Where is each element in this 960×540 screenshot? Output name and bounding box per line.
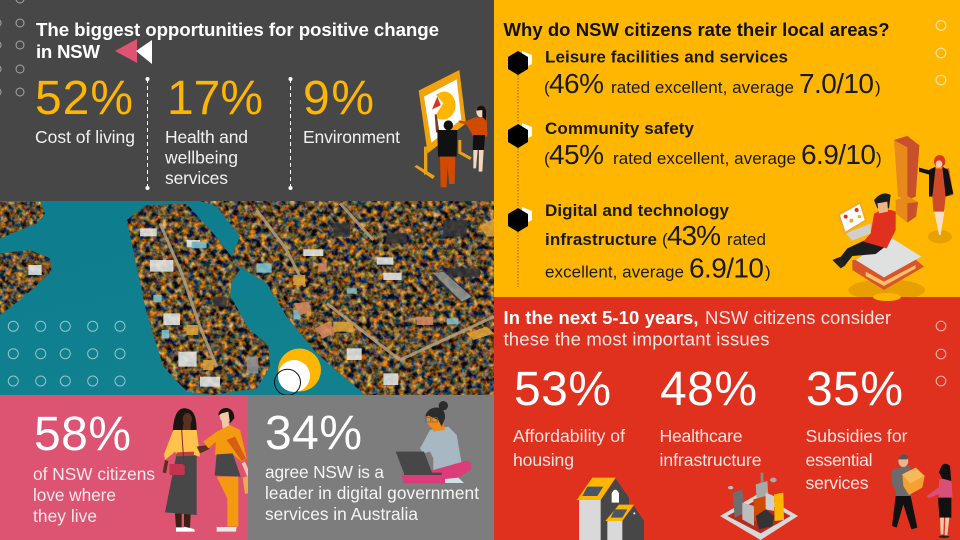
shadow fragment xyxy=(873,293,901,301)
item: community safety xyxy=(544,119,882,170)
caption xyxy=(265,462,479,524)
stat: subsidies: Subsidies for xyxy=(806,426,908,446)
stat: subsidies: 35% xyxy=(806,363,903,416)
item: community safety: ( xyxy=(544,149,550,168)
decorative circles xyxy=(936,321,946,386)
caption: love where xyxy=(33,485,116,505)
stat: cost of living: Cost of living xyxy=(35,127,135,147)
item: digital infrastructure xyxy=(545,201,771,284)
stat: subsidies: essential xyxy=(806,450,872,470)
stat: housing: Affordability of xyxy=(513,426,625,446)
illustration: two women xyxy=(163,408,259,532)
stat: healthcare: infrastructure xyxy=(660,450,762,470)
stat: health: wellbeing xyxy=(164,148,238,168)
item: digital infrastructure: Digital and technology xyxy=(545,201,730,220)
item: community safety: rated excellent, average xyxy=(613,149,796,168)
heading: In the next 5-10 years, xyxy=(504,307,698,328)
illustration: delivery person and customer xyxy=(891,454,953,538)
stat: health: 17% xyxy=(167,72,263,125)
stat: healthcare xyxy=(660,363,762,470)
statistic: 58% xyxy=(34,408,131,461)
icon: overlapping circles xyxy=(274,348,321,395)
item: leisure: 7.0/10 xyxy=(799,68,874,99)
stat: cost of living: 52% xyxy=(35,72,133,125)
illustration: city block xyxy=(720,473,798,540)
panel: love where they live xyxy=(0,395,259,540)
item: leisure: rated excellent, average xyxy=(611,78,794,97)
divider 1 xyxy=(146,77,150,190)
timeline dotted lines xyxy=(517,75,519,287)
houses and roads xyxy=(28,203,494,387)
item: digital infrastructure: infrastructure xyxy=(545,230,657,249)
heading xyxy=(36,19,439,62)
stat: environment: Environment xyxy=(303,127,400,147)
stat: cost of living xyxy=(35,72,135,147)
land base xyxy=(0,201,494,395)
stat: health: Health and xyxy=(165,127,248,147)
statistic: 34% xyxy=(265,407,362,460)
stat: subsidies: services xyxy=(806,473,869,493)
illustration: people at easel xyxy=(414,70,487,187)
heading xyxy=(504,307,891,350)
stat: housing: housing xyxy=(513,450,574,470)
item: leisure: ) xyxy=(875,78,881,97)
caption: services in Australia xyxy=(265,504,418,524)
illustration: man with laptop and exclamation mark xyxy=(832,136,953,301)
icon: triangles xyxy=(115,39,152,64)
land texture xyxy=(0,201,494,395)
heading: NSW citizens consider xyxy=(705,307,891,328)
heading: Why do NSW citizens rate their local areas? xyxy=(504,19,890,40)
item: community safety: 45% xyxy=(549,139,604,170)
item: leisure: 46% xyxy=(549,68,604,99)
stat: subsidies xyxy=(806,363,908,493)
item: community safety: ) xyxy=(876,149,882,168)
illustration: houses with solar panels xyxy=(577,478,644,540)
item: digital infrastructure: 6.9/10 xyxy=(689,252,764,284)
stat: healthcare: Healthcare xyxy=(660,426,742,446)
decorative photo dots xyxy=(8,321,125,386)
item: digital infrastructure: 43% xyxy=(667,220,721,251)
item: digital infrastructure: excellent, average xyxy=(545,262,684,282)
panel: next 5-10 years xyxy=(494,293,960,540)
icon: hexagon bullets xyxy=(508,51,532,232)
item: leisure: Leisure facilities and services xyxy=(545,48,788,66)
caption: agree NSW is a xyxy=(265,462,384,482)
stat: housing xyxy=(513,363,625,470)
caption: of NSW citizens xyxy=(33,464,155,484)
panel: biggest opportunities xyxy=(0,0,494,201)
photo: aerial view of waterfront suburb xyxy=(0,201,494,395)
heading: in NSW xyxy=(36,41,100,62)
item: community safety: 6.9/10 xyxy=(801,139,876,170)
stat: housing: 53% xyxy=(514,363,611,416)
item: leisure: ( xyxy=(544,78,550,97)
stat: health: services xyxy=(165,168,228,188)
stat: environment: 9% xyxy=(303,72,374,125)
item: community safety: Community safety xyxy=(545,119,695,138)
stat: health xyxy=(164,72,263,188)
panel: why citizens rate local areas xyxy=(494,0,960,301)
caption: they live xyxy=(33,506,97,526)
item: digital infrastructure: ( xyxy=(662,230,668,249)
stat: healthcare: 48% xyxy=(660,363,757,416)
decorative circle column xyxy=(0,0,24,96)
item: digital infrastructure: rated xyxy=(727,230,766,249)
stat: environment xyxy=(303,72,400,147)
panel: digital government xyxy=(248,395,494,540)
item: leisure xyxy=(544,48,881,99)
heading: these the most important issues xyxy=(504,328,770,350)
illustration: woman with laptop xyxy=(396,401,471,483)
heading: The biggest opportunities for positive change xyxy=(36,19,439,40)
caption: leader in digital government xyxy=(265,483,479,503)
decorative circles xyxy=(936,21,946,85)
item: digital infrastructure: ) xyxy=(765,262,771,282)
caption xyxy=(33,464,155,526)
divider 2 xyxy=(288,77,292,190)
